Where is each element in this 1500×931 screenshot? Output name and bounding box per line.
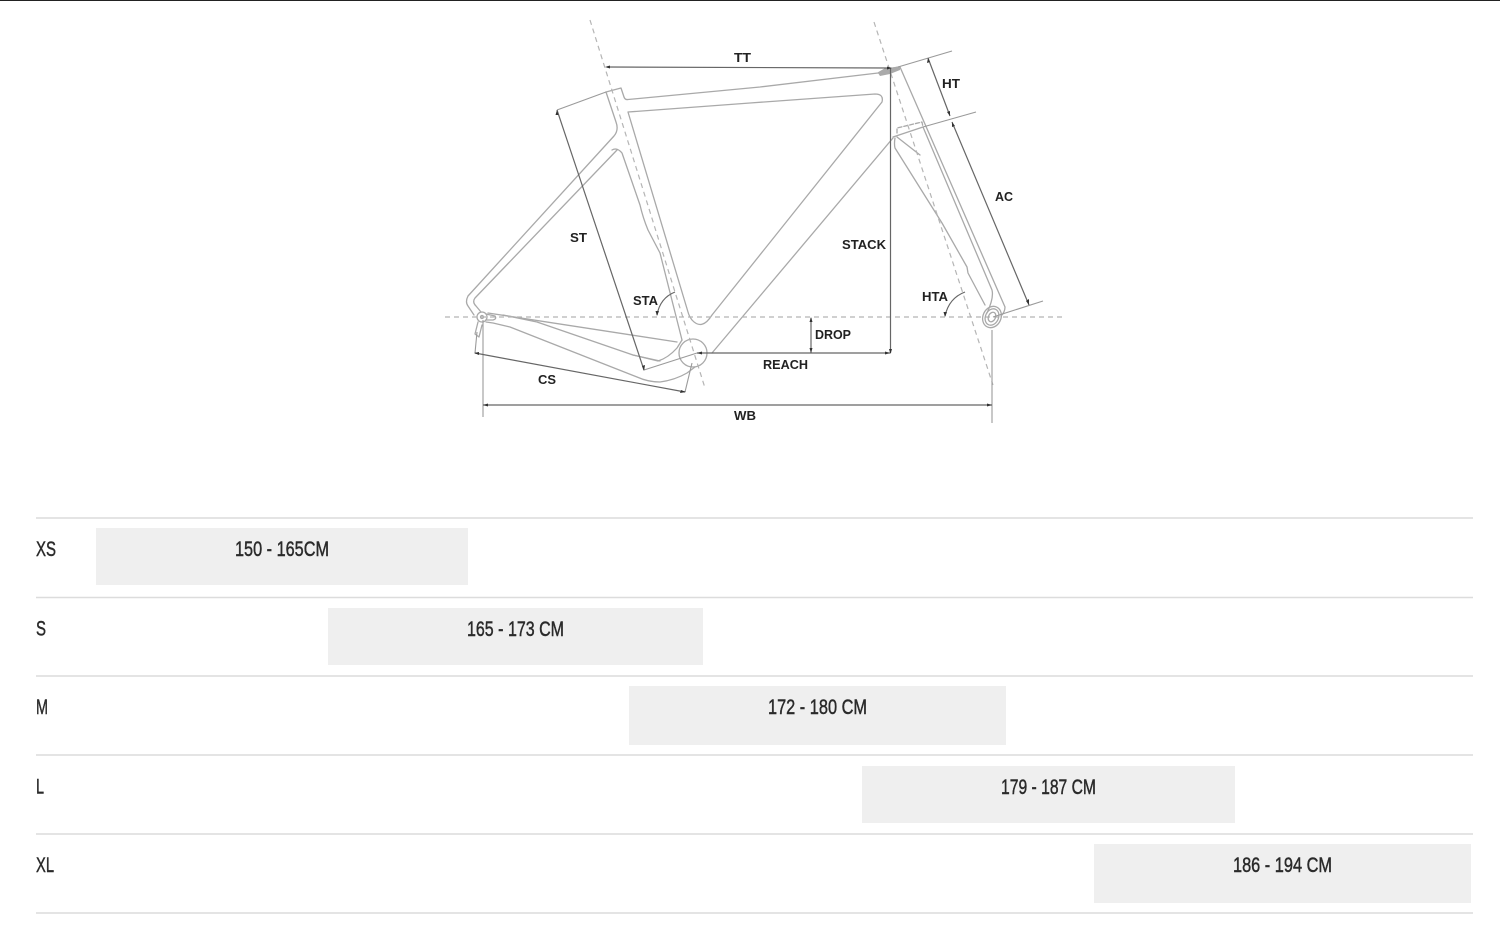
dimension labels: AC — [995, 189, 1014, 204]
row: L: 179 - 187 CM — [1001, 776, 1096, 799]
row: XL — [36, 844, 1471, 903]
dimension labels: REACH — [763, 357, 808, 372]
row: XL: 186 - 194 CM — [1233, 854, 1332, 877]
dimension labels — [538, 50, 1014, 423]
row: XS: 150 - 165CM — [235, 538, 329, 561]
dimension labels: HTA — [922, 289, 949, 304]
row: XS: XS — [36, 538, 56, 561]
dimension labels: TT — [734, 50, 751, 65]
dimension labels: ST — [570, 230, 587, 245]
row: S: 165 - 173 CM — [467, 618, 564, 641]
dimension labels: STA — [633, 293, 659, 308]
row: XL: XL — [36, 854, 54, 877]
row: S: S — [36, 618, 46, 640]
dimension labels: STACK — [842, 237, 887, 252]
dimension lines — [474, 51, 1043, 423]
geometry diagram — [445, 20, 1063, 423]
center axes — [445, 20, 1063, 388]
row: S — [36, 608, 703, 665]
dimension labels: DROP — [815, 327, 851, 342]
row: M: M — [36, 696, 48, 719]
row: XS — [36, 528, 468, 585]
bike frame outline — [466, 66, 1005, 382]
dimension labels: HT — [942, 76, 960, 91]
dimension labels: WB — [734, 408, 756, 423]
row: L: L — [36, 776, 44, 798]
row: M — [36, 686, 1006, 745]
size chart — [36, 518, 1473, 913]
row: L — [36, 766, 1235, 823]
front axle — [979, 303, 1005, 331]
dimension labels: CS — [538, 372, 556, 387]
row: M: 172 - 180 CM — [768, 696, 867, 719]
